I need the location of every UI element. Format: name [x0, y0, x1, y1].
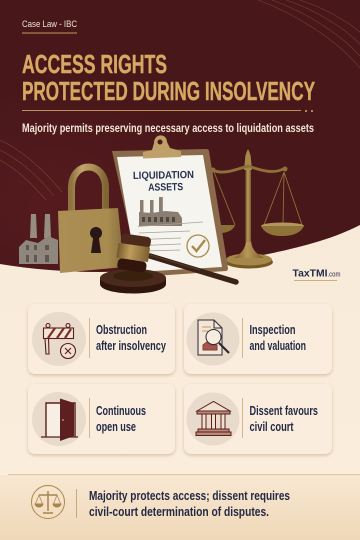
brand mark: .com: [328, 272, 341, 278]
text: inspection label: Inspection: [250, 322, 296, 337]
eyebrow label: [22, 19, 77, 34]
illustration: hero objects: [19, 135, 304, 294]
panel: dissent: [184, 384, 332, 454]
icon: barricade: [44, 324, 76, 358]
panel: obstruction: [28, 304, 175, 374]
eyebrow label: Case Law - IBC: [22, 19, 77, 30]
text: dissent label: civil court: [250, 419, 294, 434]
icon: scales of justice: [210, 149, 304, 268]
panel: continuous use: [28, 384, 175, 454]
brand mark: [292, 268, 341, 281]
text: dissent label: Dissent favours: [250, 403, 318, 418]
icon: clipboard factory: [139, 197, 182, 226]
text: continuous label: [96, 403, 146, 434]
icon: courthouse: [196, 402, 231, 436]
text: inspection label: and valuation: [250, 338, 306, 353]
text: obstruction label: [96, 322, 167, 353]
text: conclusion: Majority protects access; dissent requires: [89, 488, 290, 503]
brand mark: TaxTMI: [292, 268, 328, 280]
text: obstruction label: Obstruction: [96, 322, 147, 337]
text: conclusion: civil-court determination of disputes.: [89, 504, 269, 519]
hero maroon band: [0, 0, 360, 272]
icon: scales badge: [32, 486, 64, 518]
title: [22, 49, 315, 106]
icon: padlock: [58, 167, 124, 273]
text: inspection label: [250, 322, 306, 353]
icon: background factory: [19, 214, 58, 264]
panel: conclusion footer: [0, 474, 360, 540]
text: clipboard heading: LIQUIDATION: [133, 169, 194, 182]
text: obstruction label: after insolvency: [96, 338, 167, 353]
icon: clipboard: [112, 135, 228, 277]
text: continuous label: Continuous: [96, 403, 146, 418]
icon: document magnifier: [198, 320, 229, 355]
decorative arcs: [0, 0, 360, 200]
title: ACCESS RIGHTS: [22, 49, 167, 79]
text: continuous label: open use: [96, 419, 136, 434]
icon: check badge: [187, 235, 209, 257]
title divider: [22, 110, 313, 112]
text: clipboard heading: ASSETS: [148, 181, 183, 194]
icon: open door: [41, 398, 78, 441]
text: dissent label: [250, 403, 318, 434]
icon: gavel: [100, 233, 236, 294]
text: conclusion: [89, 488, 290, 519]
panel: inspection: [184, 304, 332, 374]
text: clipboard heading: [133, 169, 194, 194]
